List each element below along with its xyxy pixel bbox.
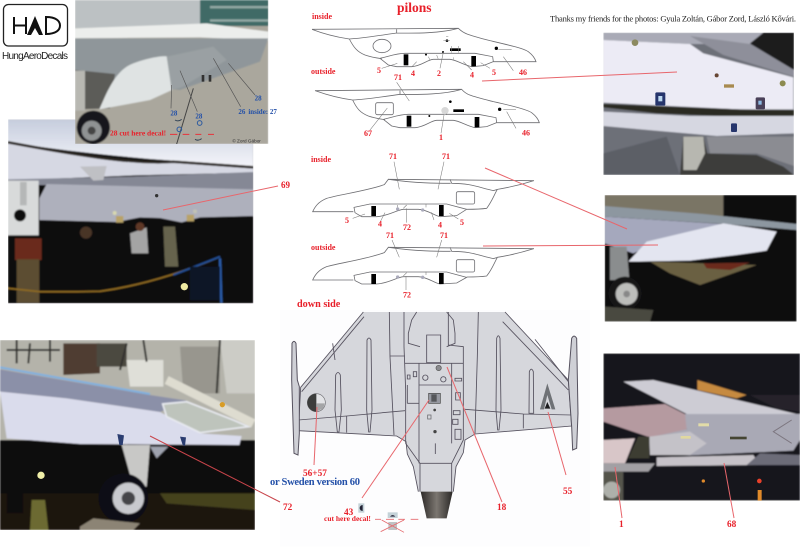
logo: HungAeroDecals: HungAeroDecals (2, 51, 68, 62)
red part labels: 71 (389, 152, 397, 161)
red part labels: 46 (522, 128, 530, 138)
photo: pylon close-up, outside (603, 33, 794, 175)
red part labels: 4 (411, 69, 415, 78)
blue decal labels on photo (170, 95, 277, 120)
red part labels: 56+57 (303, 469, 327, 479)
red part labels: 4 (378, 220, 382, 229)
red part labels: 68 (727, 520, 737, 530)
photo: pylon on wing with decal numbers (75, 0, 277, 144)
red part labels: 1 (619, 520, 624, 530)
red part labels: 5 (460, 218, 464, 227)
red part labels: 4 (470, 70, 474, 80)
red part labels: 46 (519, 68, 527, 77)
diagram: pylon outside, top (315, 82, 539, 133)
photo credit: © Zord Gábor (232, 138, 261, 144)
red part labels: inside (311, 155, 331, 164)
blue decal labels on photo: 28 (170, 110, 178, 118)
red part labels: 72 (283, 503, 293, 513)
red part labels: cut here decal! (324, 514, 371, 523)
red part labels: down side (297, 299, 341, 310)
red part labels: 4 (438, 221, 442, 230)
blue decal labels on photo: 28 (195, 112, 203, 120)
diagram: pylon inside, top (312, 28, 536, 71)
diagram: pylon inside, bottom (313, 162, 534, 223)
blue decal labels on photo: 28 (255, 95, 262, 103)
logo: HungAeroDecals (2, 4, 68, 62)
red cut here note: 28 cut here decal! (110, 129, 166, 138)
photo: main gear and pylon (0, 340, 255, 530)
red part labels: 5 (492, 68, 496, 77)
heading: pilons: pilons (397, 0, 432, 15)
red part labels: 1 (439, 133, 443, 142)
red part labels: 5 (377, 66, 381, 75)
red leader lines (150, 72, 734, 518)
decal swatches: cut here (358, 503, 418, 532)
photo: pylon under wing at night (605, 195, 797, 322)
diagram: aircraft down side (280, 310, 590, 547)
diagram: pylon outside, bottom (313, 240, 534, 290)
red part labels: 18 (497, 503, 507, 513)
red part labels: 69 (281, 180, 290, 190)
red part labels: 2 (437, 69, 441, 78)
photo: tail fin and fuselage at night (603, 353, 800, 501)
blue note: Sweden version: or Sweden version 60 (270, 477, 360, 488)
red part labels: 55 (563, 487, 573, 497)
red part labels: 72 (403, 291, 411, 300)
blue decal labels on photo: inside: 27 (248, 108, 277, 116)
red part labels: 5 (345, 216, 349, 225)
blue decal labels on photo: 26 (238, 108, 246, 116)
red part labels: 72 (403, 223, 411, 232)
red part labels: outside (311, 67, 336, 76)
red part labels: 71 (386, 231, 394, 240)
red part labels (281, 12, 737, 530)
credits text: Thanks my friends for the photos: Gyula Zoltán, Gábor Zord, László Kővári. (550, 14, 796, 24)
red part labels: 71 (394, 73, 402, 82)
red part labels: 67 (364, 129, 372, 138)
red part labels: 43 (344, 508, 354, 518)
photo: underside pod with crowd (8, 119, 253, 303)
red part labels: 71 (440, 231, 448, 240)
red part labels: 71 (442, 152, 450, 161)
red part labels: outside (311, 243, 336, 252)
red part labels: inside (312, 12, 332, 21)
